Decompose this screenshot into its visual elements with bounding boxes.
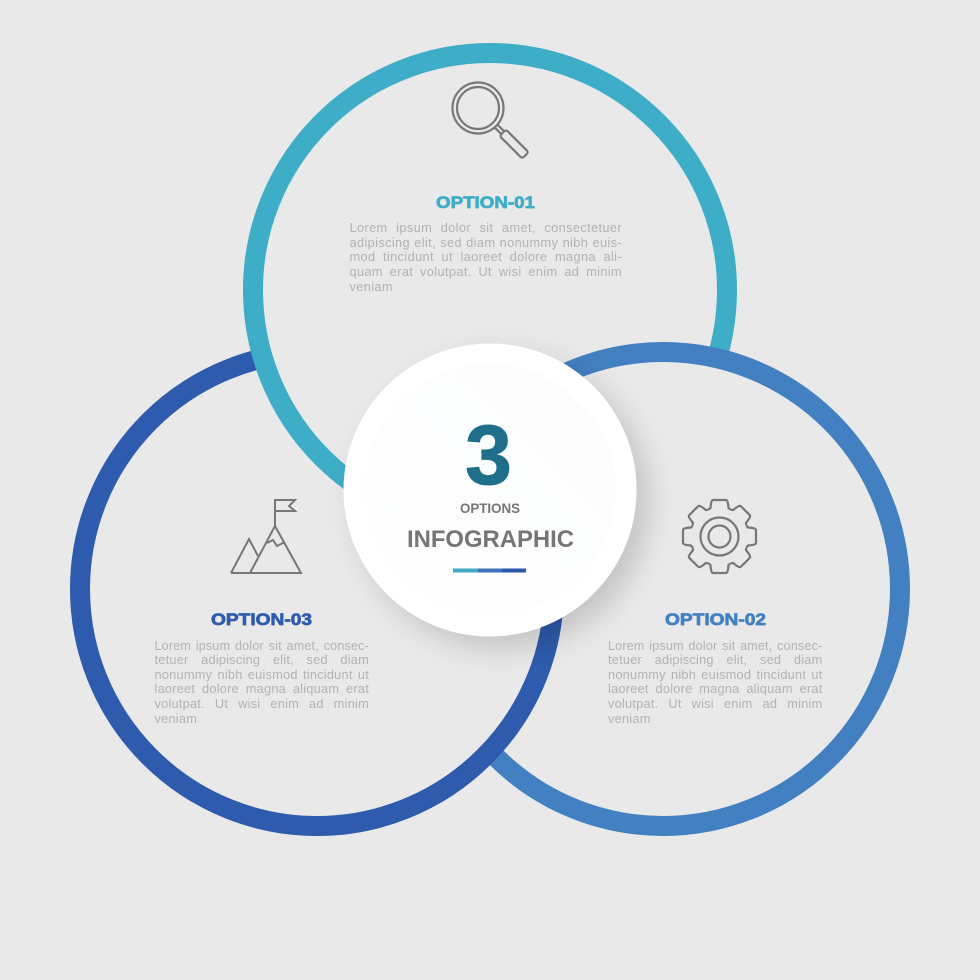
- icon: magnifier: [442, 72, 543, 173]
- text block: option 03: Lorem ipsum dolor sit amet, consec-: [154, 638, 369, 652]
- number 3: 3: [465, 408, 512, 502]
- text block: option 03: volutpat. Ut wisi enim ad minim: [154, 696, 369, 711]
- label: infographic: INFOGRAPHIC: [407, 526, 574, 553]
- icon: gear: [683, 500, 756, 573]
- text block: option 03: laoreet dolore magna aliquam erat: [154, 681, 369, 696]
- text block: option 01: Lorem ipsum dolor sit amet, consectetuer: [350, 220, 622, 235]
- text block: option 01: mod tincidunt ut laoreet dolore magna ali-: [350, 249, 622, 264]
- ring: option 01: [253, 53, 727, 527]
- ring: option 02: [426, 352, 900, 826]
- text block: option 03: [154, 638, 369, 726]
- text block: option 03: veniam: [154, 711, 197, 726]
- text block: option 01: adipiscing elit, sed diam nonummy nibh euis-: [350, 235, 622, 250]
- text block: option 01: [350, 220, 622, 294]
- ring overlap: option 02 above option 01: [563, 342, 890, 490]
- text block: option 02: nonummy nibh euismod tincidunt ut: [608, 667, 822, 682]
- text block: option 03: nonummy nibh euismod tincidunt ut: [154, 667, 369, 682]
- venn diagram graphics: [70, 43, 910, 836]
- text block: option 01: veniam: [350, 279, 393, 294]
- label: options: OPTIONS: [460, 501, 520, 516]
- heading: option 01: OPTION-01: [436, 194, 535, 212]
- heading: option 02: OPTION-02: [665, 611, 766, 629]
- accent bar: [453, 568, 526, 572]
- text block: option 02: Lorem ipsum dolor sit amet, consec-: [608, 638, 822, 652]
- ring: option 03: [80, 352, 554, 826]
- text block: option 01: quam erat volutpat. Ut wisi enim ad minim: [350, 264, 622, 279]
- heading: option 03: OPTION-03: [211, 611, 312, 629]
- text block: option 02: laoreet dolore magna aliquam erat: [608, 681, 822, 696]
- text block: option 02: veniam: [608, 711, 651, 726]
- icon: mountain with flag: [231, 500, 301, 573]
- text block: option 02: [608, 638, 822, 726]
- text block: option 03: tetuer adipiscing elit, sed diam: [154, 652, 369, 667]
- center circle: [344, 344, 636, 636]
- text block: option 02: volutpat. Ut wisi enim ad minim: [608, 696, 822, 711]
- text block: option 02: tetuer adipiscing elit, sed diam: [608, 652, 822, 667]
